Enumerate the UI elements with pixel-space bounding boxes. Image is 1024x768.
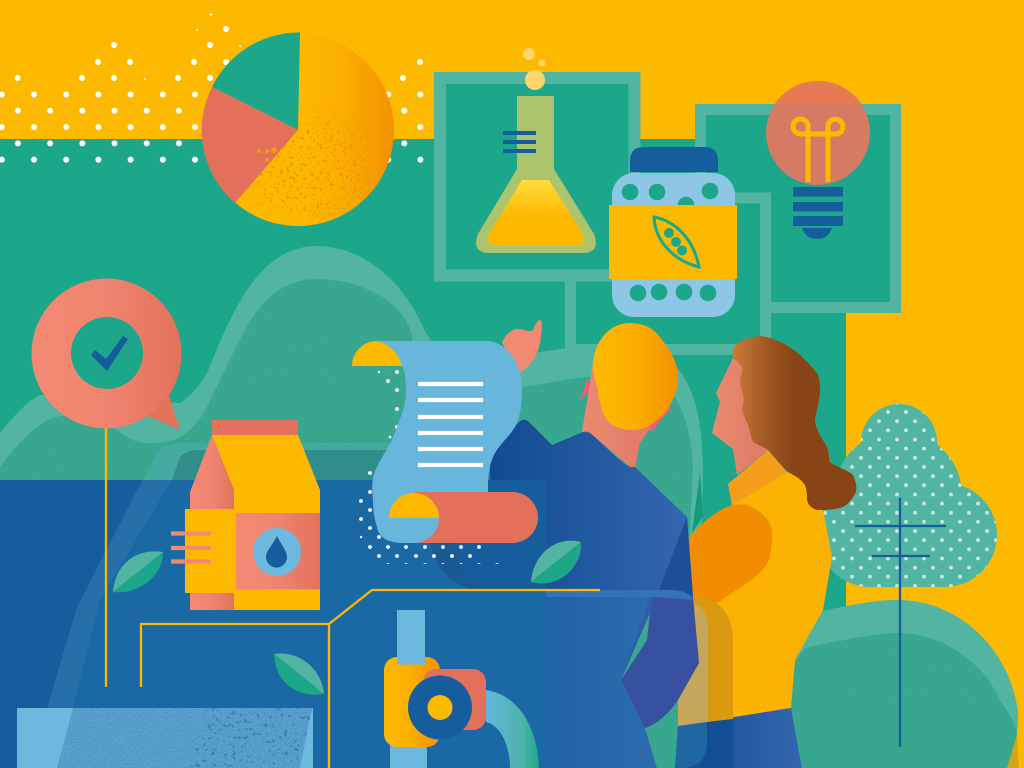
tree [823,404,997,587]
icon: jar with pea [609,147,737,317]
hill: dark sliver [692,472,703,533]
leaf left [113,551,163,592]
panel: lightbulb frame [700,110,896,308]
panel inner on ground [57,480,546,768]
man lower body under panel [546,597,657,768]
man figure [486,320,699,768]
translucent panel [30,443,546,768]
tank panel [17,708,313,768]
panel shadow arc [430,540,546,590]
icon: lightbulb [766,81,870,239]
man hair [593,323,678,430]
blue ground [0,480,546,768]
scroll document [352,341,538,543]
hill: light outline [0,246,703,768]
man ear [580,380,671,431]
panel: jar frame [570,198,766,350]
tree trunk [855,498,946,747]
hill: textured body [0,279,693,768]
panel: flask frame [440,78,634,276]
panel inner on hill [172,450,490,480]
man torso [486,420,687,680]
dots behind scroll [359,370,499,567]
speech bubble with check [32,278,182,430]
milk carton [171,420,320,610]
microscope [384,610,539,768]
pie chart [202,32,395,230]
panel top edge [546,590,694,600]
man hand [502,320,542,373]
man arm [621,517,699,728]
icon: flask [476,48,596,253]
circuit lines [106,428,600,768]
leaf lower [274,653,324,695]
panel dark blob [453,480,546,590]
man neck [582,363,652,467]
green field [0,139,846,768]
bush [790,600,1019,768]
woman figure [675,336,856,768]
leaf centre [531,541,581,584]
dotted pattern [0,13,425,165]
